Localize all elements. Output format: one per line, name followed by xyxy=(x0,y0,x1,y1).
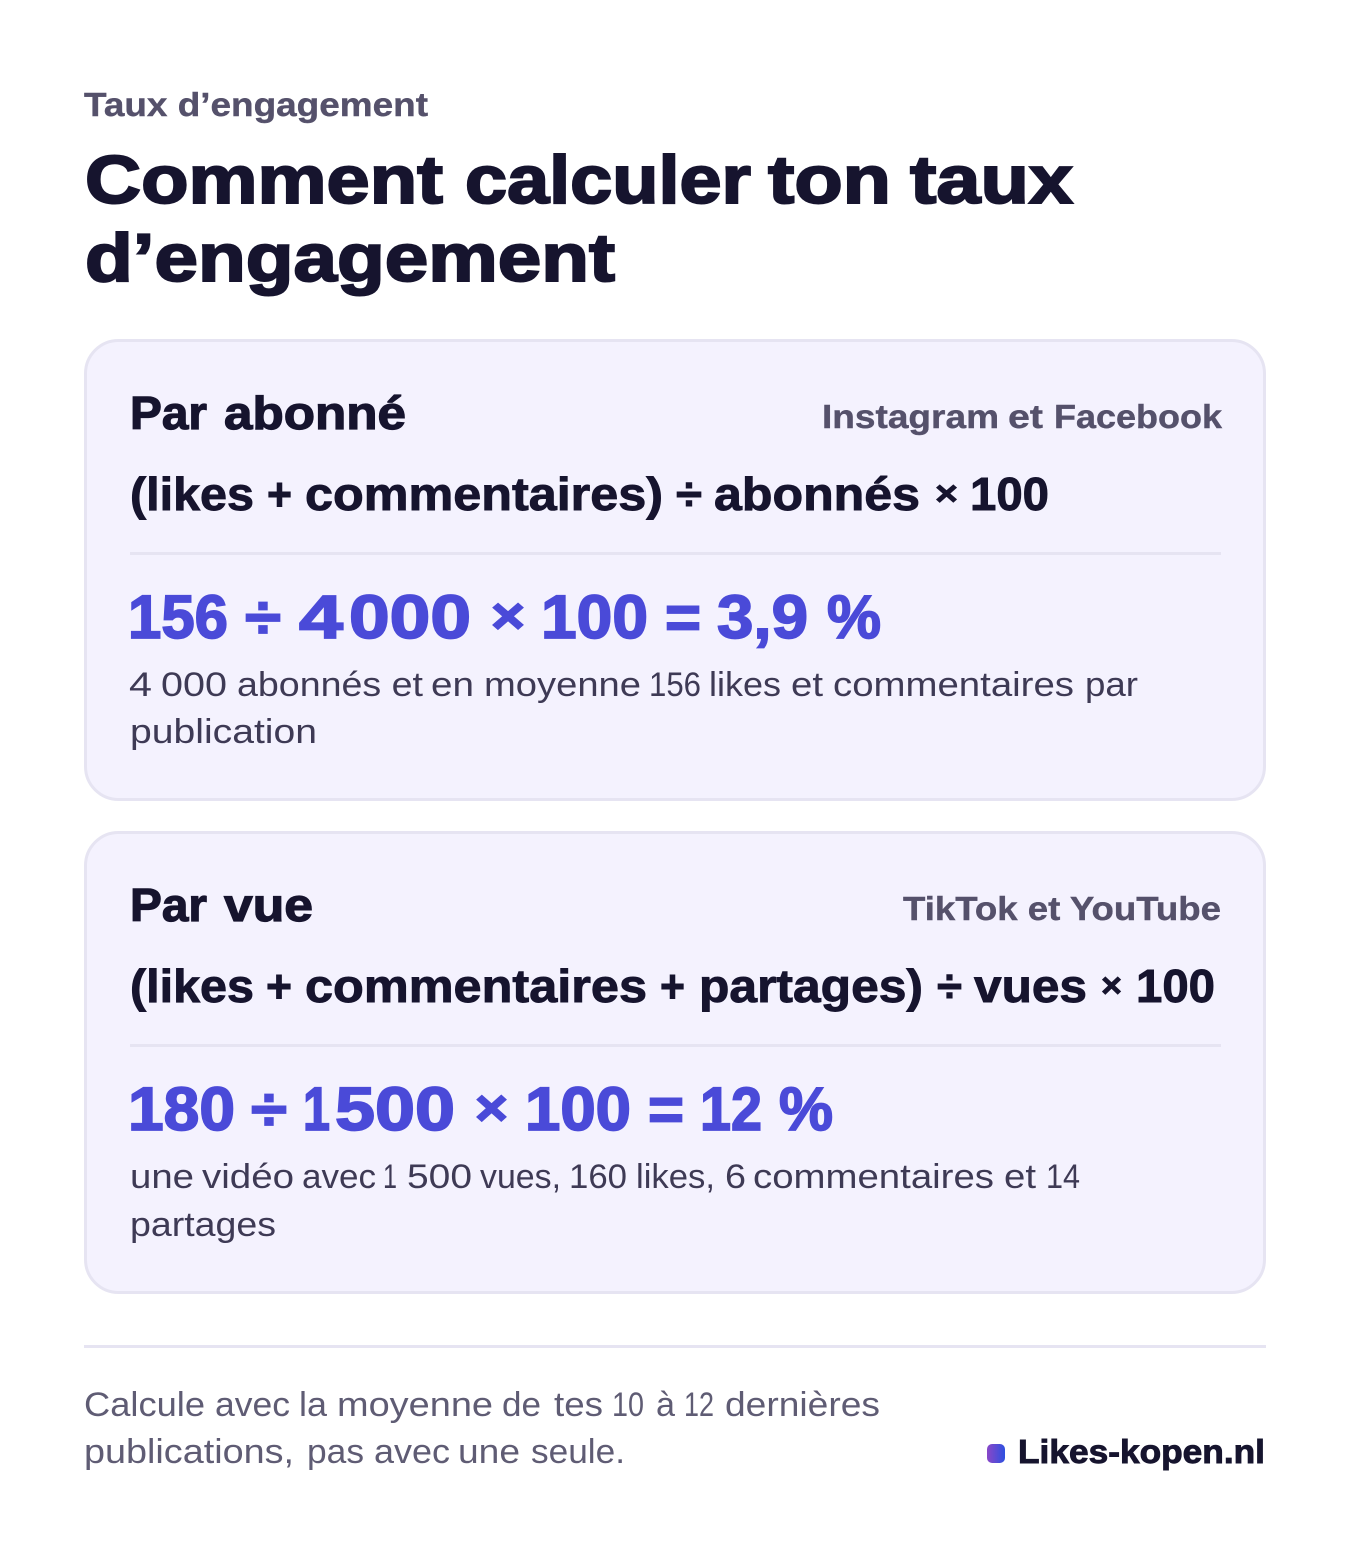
footer note: seule. xyxy=(531,1433,625,1471)
footer note: pas xyxy=(307,1433,364,1471)
example description: likes, xyxy=(636,1158,715,1196)
example description: vues, xyxy=(480,1158,561,1196)
example description: par xyxy=(1085,666,1138,704)
example description: et xyxy=(791,666,824,704)
example description: une xyxy=(130,1158,194,1196)
panel: par vue xyxy=(86,832,1264,1292)
example description: 4 xyxy=(129,666,152,704)
formula: + xyxy=(660,960,685,1012)
example description: commentaires xyxy=(753,1158,994,1196)
footer note: avec xyxy=(215,1386,290,1424)
worked calculation: 12 xyxy=(700,1075,762,1143)
panel: par abonné xyxy=(86,340,1264,800)
formula: commentaires xyxy=(305,960,647,1012)
brand name: Likes-kopen.nl xyxy=(1018,1433,1265,1470)
example description: commentaires xyxy=(833,666,1074,704)
footer note: de xyxy=(502,1386,541,1424)
example description: et xyxy=(1004,1158,1037,1196)
card heading: abonné xyxy=(224,387,406,439)
footer note: moyenne xyxy=(337,1386,493,1424)
footer note: 12 xyxy=(684,1386,714,1424)
worked calculation: × xyxy=(491,588,525,644)
example description: abonnés et xyxy=(237,666,424,704)
formula: + xyxy=(267,468,292,520)
footer note: Calcule xyxy=(84,1386,205,1424)
formula: 100 xyxy=(1136,960,1215,1012)
example description xyxy=(129,666,1138,751)
formula: × xyxy=(1101,967,1122,1005)
formula: (likes xyxy=(130,468,254,520)
title: Comment xyxy=(85,142,443,218)
formula: × xyxy=(935,475,958,513)
example description: 6 xyxy=(725,1158,746,1196)
footer note xyxy=(84,1386,880,1471)
footer note: dernières xyxy=(725,1386,880,1424)
formula: partages) xyxy=(699,960,923,1012)
worked calculation: 100 xyxy=(525,1075,631,1143)
worked calculation: 000 xyxy=(349,583,471,651)
brand logo xyxy=(987,1433,1265,1470)
worked calculation: % xyxy=(827,583,881,651)
worked calculation: = xyxy=(665,583,701,651)
footer note: à xyxy=(656,1386,675,1424)
example description xyxy=(130,1158,1080,1244)
example description: avec xyxy=(302,1158,376,1196)
formula: ÷ xyxy=(937,960,962,1012)
formula: 100 xyxy=(970,468,1049,520)
worked calculation: ÷ xyxy=(245,583,281,651)
platform label: Facebook xyxy=(1054,398,1223,435)
formula: commentaires) xyxy=(305,468,663,520)
example description: 156 xyxy=(649,666,701,704)
eyebrow heading: Taux d’engagement xyxy=(84,86,428,123)
platform label: TikTok et YouTube xyxy=(903,890,1221,927)
title: taux xyxy=(910,142,1073,218)
worked calculation: 3,9 xyxy=(717,583,808,651)
formula: vues xyxy=(974,960,1087,1012)
worked calculation: 1 xyxy=(303,1075,330,1143)
worked calculation: 156 xyxy=(128,583,228,651)
platform label: Instagram xyxy=(822,398,999,435)
example description: likes xyxy=(709,666,781,704)
worked calculation: 500 xyxy=(335,1075,455,1143)
example description: moyenne xyxy=(484,666,641,704)
worked calculation: = xyxy=(648,1075,684,1143)
example description: 1 xyxy=(383,1158,397,1196)
card heading: Par xyxy=(130,879,207,931)
example description: partages xyxy=(130,1206,276,1244)
example description: vidéo xyxy=(202,1158,294,1196)
example description: 500 xyxy=(407,1158,472,1196)
footer note: la xyxy=(299,1386,327,1424)
formula: abonnés xyxy=(714,468,920,520)
title: calculer xyxy=(465,142,751,218)
footer note: publications, xyxy=(84,1433,294,1471)
example description: en xyxy=(431,666,474,704)
card heading: vue xyxy=(224,879,313,931)
example description: 160 xyxy=(569,1158,627,1196)
platform label: et xyxy=(1008,398,1043,435)
worked calculation: × xyxy=(475,1080,508,1136)
worked calculation: 180 xyxy=(128,1075,235,1143)
icon: brand square xyxy=(987,1444,1005,1463)
worked calculation: 4 xyxy=(299,583,343,651)
title: ton xyxy=(768,142,891,218)
example description: 000 xyxy=(161,666,227,704)
formula: + xyxy=(266,960,292,1012)
footer note: 10 xyxy=(612,1386,644,1424)
footer note: tes xyxy=(554,1386,603,1424)
title: d’engagement xyxy=(85,220,615,296)
worked calculation: % xyxy=(779,1075,833,1143)
formula: (likes xyxy=(130,960,254,1012)
worked calculation: 100 xyxy=(541,583,648,651)
title xyxy=(85,142,1073,296)
example description: publication xyxy=(130,713,317,751)
example description: 14 xyxy=(1046,1158,1080,1196)
footer note: une xyxy=(458,1433,520,1471)
formula: ÷ xyxy=(676,468,702,520)
card heading: Par xyxy=(130,387,207,439)
worked calculation: ÷ xyxy=(251,1075,287,1143)
footer note: avec xyxy=(374,1433,450,1471)
